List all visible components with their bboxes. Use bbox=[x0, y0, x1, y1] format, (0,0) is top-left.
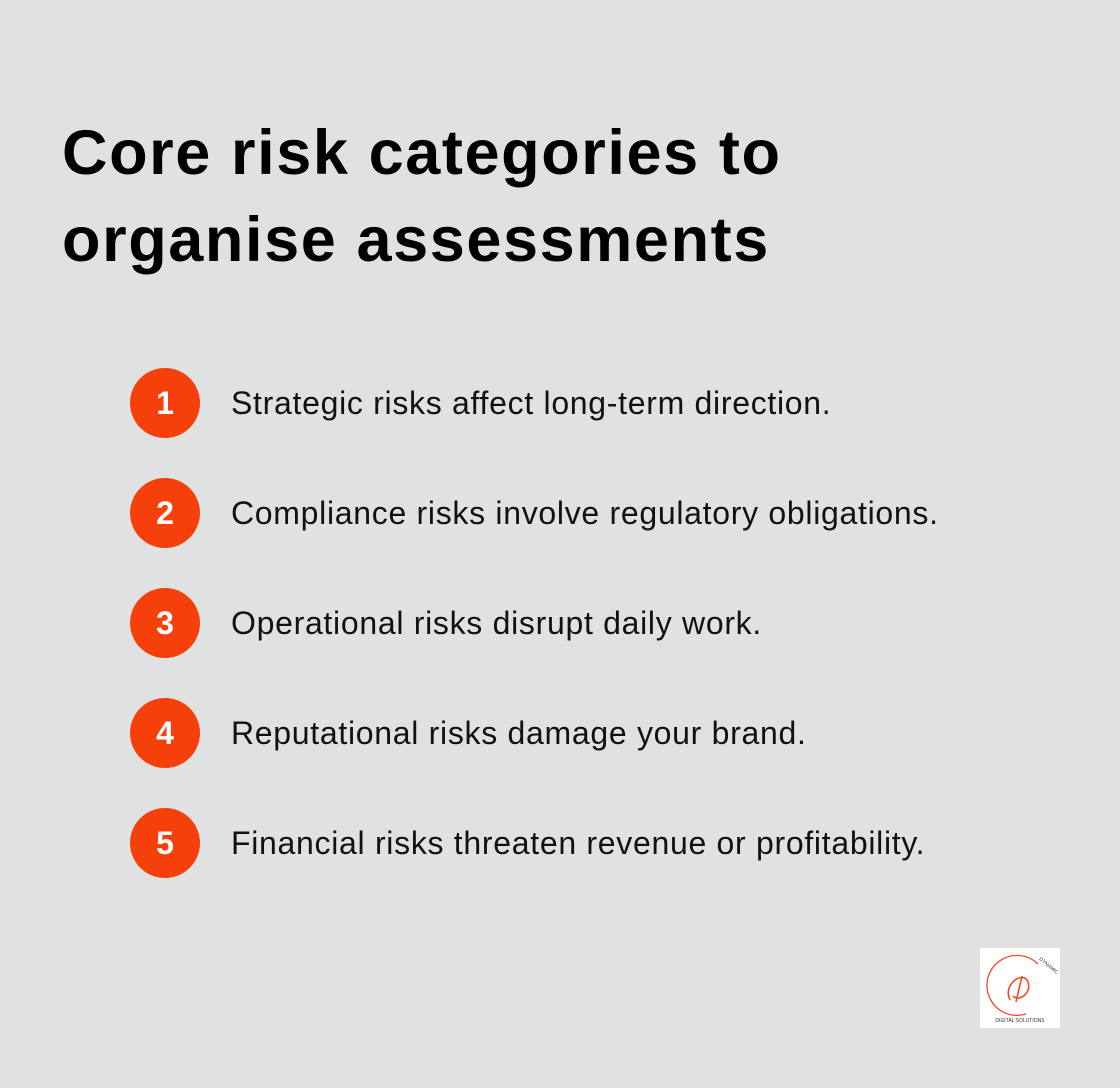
item 4 bbox=[130, 698, 807, 768]
item 4: Reputational risks damage your brand. bbox=[231, 715, 807, 751]
item 1 bbox=[130, 368, 831, 438]
item 1: Strategic risks affect long-term direction. bbox=[231, 385, 831, 421]
item 2 bbox=[130, 478, 939, 548]
item 2: 2 bbox=[156, 495, 174, 531]
logo bbox=[980, 948, 1060, 1028]
item 3 bbox=[130, 588, 762, 658]
logo: DIGITAL SOLUTIONS bbox=[995, 1018, 1045, 1024]
item 5 bbox=[130, 808, 925, 878]
item 4: 4 bbox=[156, 715, 174, 751]
item 2: Compliance risks involve regulatory obligations. bbox=[231, 495, 939, 531]
item 5: 5 bbox=[156, 825, 174, 861]
item 1: 1 bbox=[156, 385, 174, 421]
item 3: 3 bbox=[156, 605, 174, 641]
item 3: Operational risks disrupt daily work. bbox=[231, 605, 762, 641]
title: Core risk categories to bbox=[62, 118, 782, 188]
title bbox=[62, 118, 782, 275]
item 5: Financial risks threaten revenue or profitability. bbox=[231, 825, 925, 861]
title: organise assessments bbox=[62, 205, 770, 275]
logo: DYNAMIC bbox=[1038, 956, 1059, 976]
